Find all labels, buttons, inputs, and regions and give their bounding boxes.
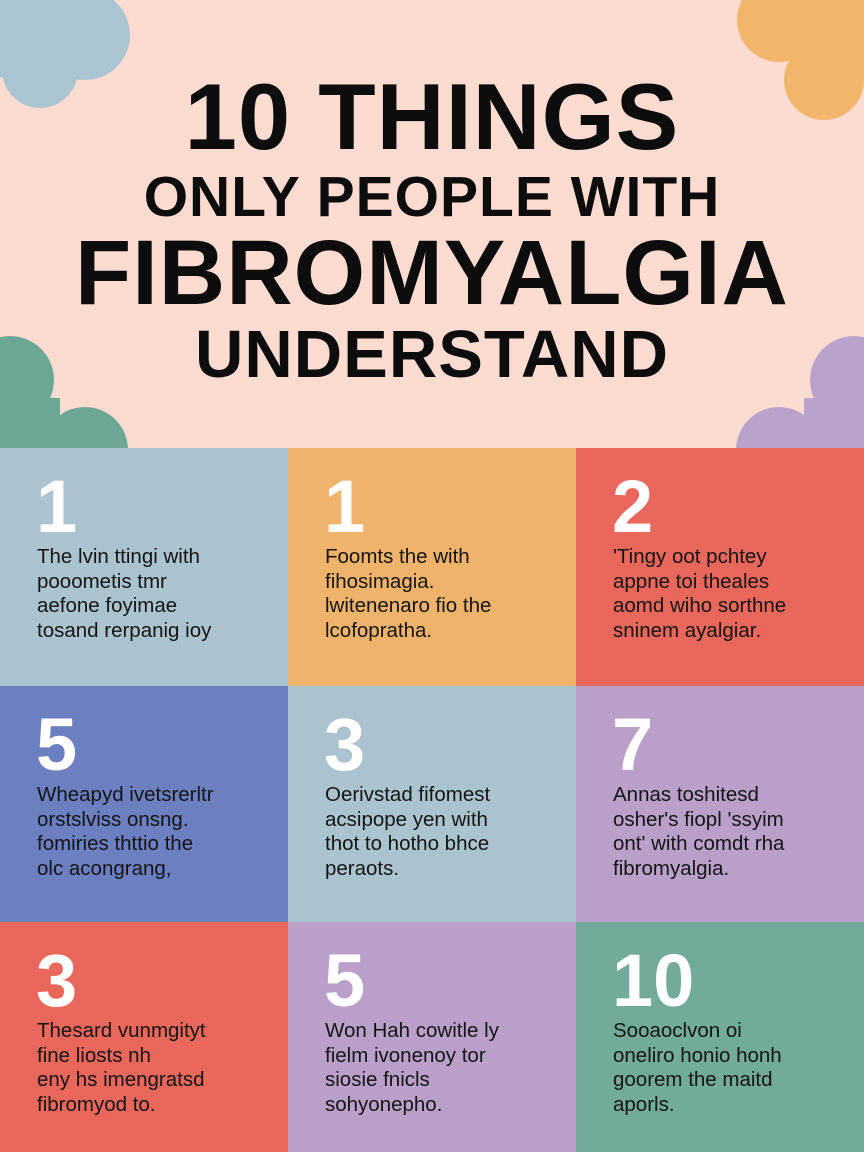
item 1: pooometis tmr	[37, 570, 167, 592]
decorative blob: bottom-right	[736, 336, 864, 448]
item 5: acsipope yen with	[325, 808, 488, 830]
item 1	[0, 448, 288, 686]
item 4: olc acongrang,	[37, 856, 171, 880]
item 7: eny hs imengratsd	[37, 1068, 205, 1091]
item 7: fine liosts nh	[37, 1044, 151, 1066]
item 8: sohyonepho.	[325, 1092, 442, 1116]
item 3: appne toi theales	[613, 570, 769, 592]
item 1: aefone foyimae	[37, 594, 177, 617]
item 4: Wheapyd ivetsrerltr	[37, 783, 214, 806]
item 7	[0, 922, 288, 1152]
item 6: ont' with comdt rha	[613, 832, 784, 855]
item 4: orstslviss onsng.	[37, 808, 189, 830]
item 6: 7	[612, 703, 653, 786]
item 2	[288, 448, 576, 686]
item 8: siosie fnicls	[325, 1068, 430, 1091]
item 1: tosand rerpanig ioy	[37, 618, 211, 642]
item 9: goorem the maitd	[613, 1068, 773, 1091]
item 6: Annas toshitesd	[613, 783, 759, 806]
item 9	[576, 922, 864, 1152]
item 1: The lvin ttingi with	[37, 545, 200, 568]
item 4	[0, 686, 288, 922]
title line 3: FIBROMYALGIA	[75, 222, 789, 324]
item 7: Thesard vunmgityt	[37, 1019, 206, 1042]
item 7: fibromyod to.	[37, 1092, 156, 1116]
item 9: Sooaoclvon oi	[613, 1019, 742, 1042]
item 5: thot to hotho bhce	[325, 832, 489, 855]
item 6: fibromyalgia.	[613, 856, 729, 880]
item 6	[576, 686, 864, 922]
item 2: lcofopratha.	[325, 618, 432, 642]
header	[0, 0, 864, 448]
item 5	[288, 686, 576, 922]
title line 4: UNDERSTAND	[195, 317, 669, 392]
item 5: 3	[324, 703, 365, 786]
title line 1: 10 THINGS	[185, 64, 679, 169]
item 4: fomiries thttio the	[37, 832, 193, 855]
item 8: 5	[324, 939, 365, 1022]
item 2: 1	[324, 465, 365, 548]
item 5: Oerivstad fifomest	[325, 783, 490, 806]
item 8: Won Hah cowitle ly	[325, 1019, 499, 1042]
title line 2: ONLY PEOPLE WITH	[144, 165, 720, 229]
decorative blob: bottom-left	[0, 336, 128, 448]
item 3: sninem ayalgiar.	[613, 618, 761, 642]
item 8	[288, 922, 576, 1152]
item 3: aomd wiho sorthne	[613, 594, 786, 617]
item 6: osher's fiopl 'ssyim	[613, 808, 784, 830]
item 2: lwitenenaro fio the	[325, 594, 491, 617]
decorative blob: top-left	[0, 0, 130, 108]
item 4: 5	[36, 703, 77, 786]
item 2: fihosimagia.	[325, 570, 434, 592]
item 8: fielm ivonenoy tor	[325, 1044, 486, 1066]
item 9: oneliro honio honh	[613, 1044, 782, 1066]
item 5: peraots.	[325, 856, 399, 880]
item 2: Foomts the with	[325, 545, 470, 568]
item 3: 2	[612, 465, 653, 548]
decorative blob: top-right	[737, 0, 864, 120]
grid of items	[0, 448, 864, 1152]
item 3: 'Tingy oot pchtey	[613, 545, 767, 568]
item 1: 1	[36, 465, 77, 548]
item 9: 10	[612, 939, 694, 1022]
item 7: 3	[36, 939, 77, 1022]
item 3	[576, 448, 864, 686]
item 9: aporls.	[613, 1092, 675, 1116]
